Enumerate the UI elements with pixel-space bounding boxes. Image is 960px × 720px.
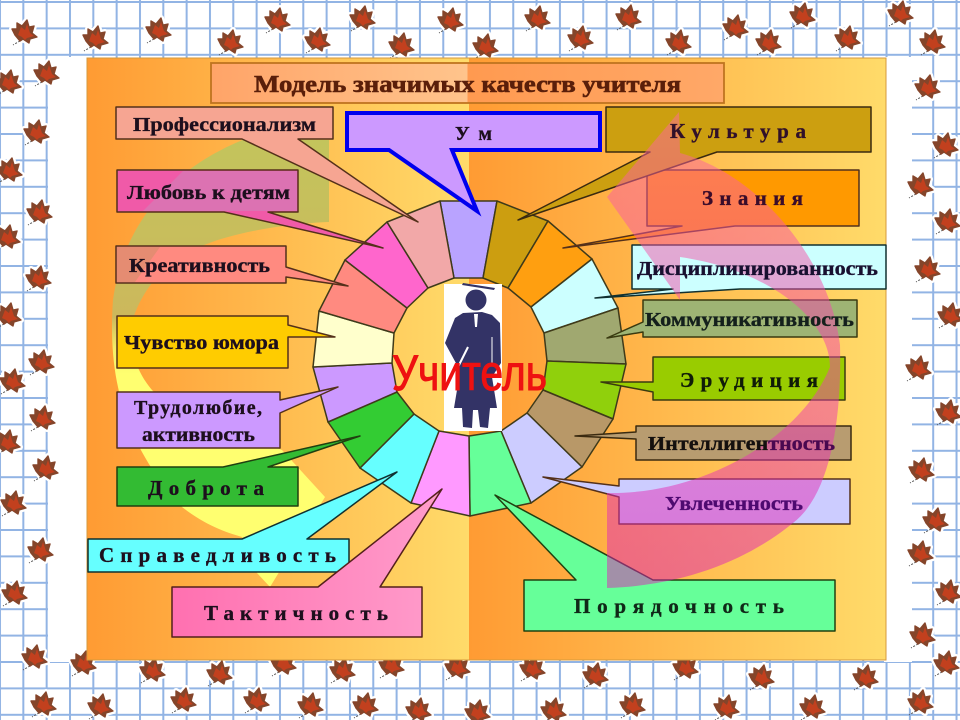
- callout: Чувство юмора: [117, 316, 335, 368]
- label: Эрудиция: Эрудиция: [680, 368, 818, 392]
- callout: Трудолюбие, активность: активность: [142, 424, 255, 446]
- label: Интеллигентность: Интеллиген тность: [648, 433, 835, 455]
- callout shape: Культура: [518, 107, 871, 220]
- callout: Доброта: Доброта: [148, 476, 264, 500]
- callout: Профессионализм: Профессионализм: [133, 114, 316, 136]
- callout: Профессионализм: [116, 107, 418, 222]
- label: Увлеченность: Увлеченность: [665, 493, 803, 515]
- callout: Тактичность: [172, 489, 442, 637]
- callout: Справедливость: Справедливость: [99, 543, 336, 567]
- callout: Трудолюбие, активность: Трудолюбие,: [134, 397, 262, 419]
- callout: Тактичность: Тактичность: [204, 601, 388, 625]
- centre label: Учитель: Учитель: [392, 345, 547, 401]
- callout shape: Коммуникативность: [607, 300, 857, 338]
- label: Коммуникативность: Коммуникативность: [645, 309, 854, 331]
- callout shape: Знания: [563, 170, 859, 248]
- callout: Ум (highlighted, blue outline): Ум: [455, 123, 492, 145]
- central teacher figure: [444, 283, 502, 431]
- callout shape: Увлеченность: [543, 477, 850, 524]
- callout: Любовь к детям: Любовь к детям: [127, 182, 290, 204]
- callout shape: Интеллигентность: [575, 426, 851, 460]
- callout shape: Дисциплинированность: [595, 245, 886, 298]
- callout: Доброта: [117, 436, 360, 506]
- callout: Справедливость: [88, 472, 397, 572]
- callout: Креативность: Креативность: [129, 255, 270, 277]
- arrow: right curved pink-magenta block arrow: [607, 112, 840, 588]
- callout shape: Эрудиция: [601, 357, 845, 400]
- label: Знания: Знания: [702, 186, 803, 210]
- title: [211, 63, 724, 103]
- label: Дисциплинированность: Дисциплинированность: [637, 258, 878, 280]
- title: Модель значимых качеств учителя: [254, 72, 681, 98]
- label: Порядочность: Порядочность: [574, 594, 784, 618]
- label: Культура: Культура: [670, 119, 806, 143]
- callout: Креативность: [116, 246, 348, 286]
- arrow: left curved olive-to-yellow block arrow: [112, 139, 329, 587]
- panel: main orange background: [87, 58, 886, 660]
- callout: Ум (highlighted, blue outline): [347, 113, 600, 211]
- chart: quality wheel with 17 segments: [313, 201, 626, 516]
- callout: Любовь к детям: [117, 170, 383, 248]
- callout shape: Порядочность: [495, 495, 835, 631]
- callout: Чувство юмора: Чувство юмора: [124, 332, 279, 354]
- callout: Трудолюбие, активность: [117, 387, 338, 448]
